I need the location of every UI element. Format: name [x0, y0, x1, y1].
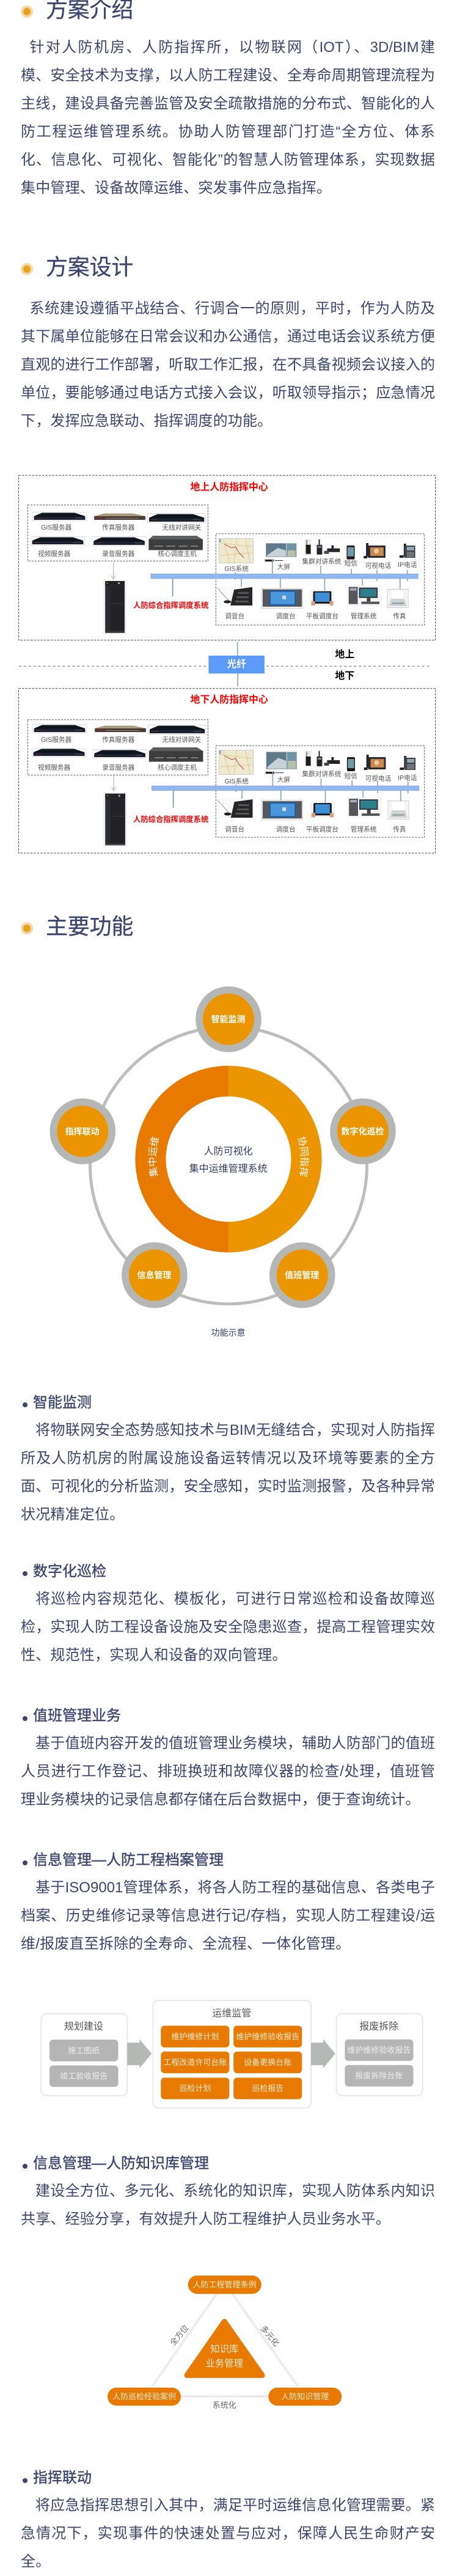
- icon: section bullet 2: [21, 263, 33, 275]
- pill: 人防巡检经验案例: [108, 2388, 181, 2406]
- node: 智能监测: 智能监测: [211, 1015, 246, 1024]
- text block: 人防工程档案管理: 维/报废直至拆除的全寿命、全流程、一体化管理。: [21, 1936, 350, 1952]
- center triangle: 知识库业务管理: 业务管理: [206, 2358, 243, 2369]
- panel: terminal group: 传真: [393, 826, 406, 834]
- panel: terminal group: 集群对讲系统: [302, 770, 342, 778]
- node: 信息管理: 信息管理: [137, 1270, 171, 1280]
- panel: 运维监管: 维护维修验收报告: [236, 2032, 299, 2041]
- pill: 人防工程管理条例: [188, 2276, 261, 2294]
- panel: server group: 无线对讲网关: [162, 524, 201, 531]
- text block: 方案设计 body: 系统建设遵循平战结合、行调合一的原则，平时，作为人防及: [29, 300, 435, 317]
- heading: 指挥联动: 指挥联动: [33, 2470, 92, 2486]
- bus line: [151, 574, 418, 579]
- text block: 智能监测: [21, 1422, 435, 1523]
- node: 信息管理: [122, 1242, 188, 1308]
- text block: 值班管理业务: 人员进行工作登记、排班换班和故障仪器的检查/处理，值班管: [21, 1763, 435, 1780]
- text block: 值班管理业务: 理业务模块的记录信息都存储在后台数据中，便于查询统计。: [21, 1791, 420, 1808]
- text block: 方案介绍 body: 针对人防机房、人防指挥所，以物联网（IOT）、3D/BIM建: [29, 39, 435, 56]
- caption: 功能示意: 功能示意: [211, 1328, 246, 1338]
- divider: ground line: [19, 665, 431, 667]
- panel: 规划建设: 竣工验收报告: [60, 2071, 108, 2081]
- chart: function ring diagram: [50, 986, 396, 1338]
- text block: 数字化巡检: 性、规范性，实现人和设备的双向管理。: [21, 1647, 287, 1664]
- feature bullet: 数字化巡检: [23, 1571, 27, 1576]
- box: 光纤: [208, 656, 265, 673]
- text block: 人防知识库管理: 共享、经验分享，有效提升人防工程维护人员业务水平。: [21, 2211, 390, 2227]
- arrow: servers to cabinet: [112, 775, 116, 791]
- connector: fiber up: [237, 642, 238, 656]
- icon: server cabinet: [103, 793, 127, 846]
- panel: terminal group: 大屏: [277, 776, 290, 784]
- feature bullet: 指挥联动: [23, 2478, 27, 2483]
- feature bullet: 值班管理业务: [23, 1716, 27, 1721]
- feature bullet: 人防知识库管理: [23, 2164, 27, 2169]
- panel: terminal group: 管理系统: [351, 612, 377, 620]
- text block: 指挥联动: 急情况下，实现事件的快速处置与应对，保障人民生命财产安: [21, 2525, 435, 2542]
- text block: 人防知识库管理: 建设全方位、多元化、系统化的知识库，实现人防体系内知识: [35, 2183, 435, 2199]
- network architecture diagram: [18, 475, 436, 854]
- panel: terminal group: [216, 534, 425, 625]
- panel: 运维监管: 维护维修计划: [171, 2032, 219, 2041]
- heading: 地上人防指挥中心: 地上人防指挥中心: [191, 481, 268, 493]
- outer ring: [90, 1027, 367, 1304]
- panel: 运维监管: 工程改造许可台账: [163, 2058, 227, 2067]
- text block: 智能监测: 将物联网安全态势感知技术与BIM无缝结合，实现对人防指挥: [35, 1422, 435, 1438]
- flow diagram: lifecycle: [40, 2000, 423, 2109]
- panel: terminal group: 管理系统: [351, 826, 377, 834]
- text block: 值班管理业务: [21, 1735, 435, 1808]
- text block: 方案设计 body: [21, 300, 435, 429]
- label: 地上: 地上: [335, 649, 354, 660]
- heading: 信息管理—人防工程档案管理: 信息管理—人防工程档案管理: [33, 1852, 224, 1868]
- panel: 规划建设: 施工图纸: [68, 2046, 100, 2055]
- pill: 人防巡检经验案例: 人防巡检经验案例: [112, 2392, 176, 2401]
- text block: 方案介绍 body: 化、信息化、可视化、智能化”的智慧人防管理体系，实现数据: [21, 152, 435, 168]
- panel: terminal group: 可视电话: [365, 774, 392, 782]
- node: 值班管理: [269, 1242, 335, 1308]
- icon: server cabinet: [103, 580, 126, 634]
- pill: 人防知识管理: 人防知识管理: [281, 2392, 329, 2401]
- outer triangle edges: [152, 2293, 298, 2396]
- connector: system stub: [173, 790, 174, 808]
- text block: 数字化巡检: 检，实现人防工程设备设施及安全隐患巡查，提高工程管理实效: [21, 1619, 435, 1635]
- panel: 报废拆除: [337, 2013, 423, 2096]
- panel: 报废拆除: 报废拆除: [359, 2021, 398, 2032]
- center triangle: 知识库业务管理: 知识库: [210, 2344, 238, 2355]
- panel: 规划建设: 规划建设: [64, 2021, 103, 2032]
- text block: 数字化巡检: 将巡检内容规范化、模板化，可进行日常巡检和设备故障巡: [35, 1591, 435, 1607]
- text block: 人防工程档案管理: [21, 1879, 435, 1952]
- text block: 值班管理业务: 基于值班内容开发的值班管理业务模块，辅助人防部门的值班: [35, 1735, 435, 1752]
- connector: fiber down: [237, 673, 238, 686]
- donut: 集中运维 half: [135, 1065, 228, 1253]
- panel: terminal group: IP电话: [398, 561, 417, 569]
- bus line: [152, 786, 419, 790]
- panel: 报废拆除: 维护维修验收报告: [347, 2046, 411, 2055]
- donut: 协同指挥 half: 协同指挥: [298, 1136, 309, 1177]
- text block: 指挥联动: [21, 2497, 435, 2570]
- text block: 人防工程档案管理: 档案、历史维修记录等信息进行记/存档，实现人防工程建设/运: [21, 1908, 435, 1924]
- panel: server group: 传真服务器: [102, 736, 135, 744]
- text block: 指挥联动: 全。: [21, 2553, 50, 2570]
- panel: terminal group: 短信: [345, 560, 357, 568]
- heading: 地下人防指挥中心: 地下人防指挥中心: [191, 694, 268, 705]
- pill: 人防工程管理条例: 人防工程管理条例: [192, 2280, 257, 2289]
- feature bullet: 人防工程档案管理: [23, 1860, 27, 1865]
- panel: 运维监管: 运维监管: [212, 2008, 251, 2019]
- center label: 人防可视化: [204, 1146, 253, 1157]
- heading: 智能监测: 智能监测: [33, 1394, 92, 1411]
- text block: 指挥联动: 将应急指挥思想引入其中，满足平时运维信息化管理需要。紧: [35, 2497, 435, 2514]
- center label: [189, 1146, 268, 1174]
- donut: 集中运维 half: 集中运维: [148, 1136, 159, 1177]
- panel: 运维监管: 设备更换台账: [244, 2058, 291, 2067]
- heading: 信息管理—人防知识库管理: 信息管理—人防知识库管理: [33, 2155, 209, 2172]
- text block: 方案设计 body: 单位，要能够通过电话方式接入会议，听取领导指示；应急情况: [21, 385, 435, 401]
- text block: 方案介绍 body: 集中管理、设备故障运维、突发事件应急指挥。: [21, 180, 331, 196]
- panel: terminal group: 可视电话: [365, 562, 392, 570]
- panel: server group: 传真服务器: [102, 524, 135, 531]
- panel: server group: 视频服务器: [38, 550, 70, 558]
- text block: 人防工程档案管理: 基于ISO9001管理体系，将各人防工程的基础信息、各类电子: [35, 1879, 435, 1896]
- text block: 方案设计 body: 直观的进行工作部署，听取工作汇报，在不具备视频会议接入的: [21, 357, 435, 373]
- heading: 值班管理业务: 值班管理业务: [33, 1708, 121, 1724]
- panel: 地下人防指挥中心: [19, 689, 436, 853]
- panel: terminal group: 调音台: [225, 612, 244, 620]
- text block: 智能监测: 状况精准定位。: [21, 1506, 124, 1523]
- text block: 智能监测: 所及人防机房的附属设施设备运转情况以及环境等要素的全方: [21, 1450, 435, 1467]
- node: 值班管理: 值班管理: [285, 1270, 319, 1280]
- node: 数字化巡检: [330, 1098, 396, 1164]
- panel: terminal group: 调度台: [276, 612, 296, 620]
- panel: terminal group: GIS系统: [224, 777, 249, 785]
- arrow: 运维 to 报废: [311, 2039, 335, 2068]
- section title: 主要功能: 主要功能: [46, 914, 133, 939]
- panel: 规划建设: [41, 2013, 127, 2096]
- panel: server group: 核心调度主机: [158, 763, 197, 771]
- node: 指挥联动: [50, 1098, 115, 1164]
- panel: server group: GIS服务器: [41, 736, 72, 744]
- panel: terminal group: 集群对讲系统: [302, 558, 342, 566]
- heading: 数字化巡检: 数字化巡检: [33, 1563, 106, 1580]
- panel: terminal group: GIS系统: [224, 565, 249, 573]
- text block: 方案设计 body: 下，发挥应急联动、指挥调度的功能。: [21, 413, 272, 429]
- label: 系统化: 系统化: [213, 2400, 236, 2410]
- panel: 运维监管: 巡检报告: [252, 2084, 283, 2093]
- panel: terminal group: 大屏: [277, 563, 290, 571]
- panel: server group: 视频服务器: [38, 763, 70, 771]
- panel: server group: 录音服务器: [102, 550, 135, 558]
- text block: 智能监测: 面、可视化的分析监测，安全感知，实时监测报警，及各种异常: [21, 1478, 435, 1495]
- center label: 集中运维管理系统: [189, 1163, 268, 1174]
- section title: 方案设计: 方案设计: [46, 254, 133, 279]
- icon: section bullet 1: [21, 6, 33, 18]
- panel: terminal group: 平板调度台: [306, 826, 338, 834]
- text block: 方案介绍 body: 模、安全技术为支撑，以人防工程建设、全寿命周期管理流程为: [21, 67, 435, 84]
- panel: server group: GIS服务器: [41, 524, 72, 531]
- feature bullet: 智能监测: [23, 1402, 27, 1407]
- text block: 方案介绍 body: [21, 39, 435, 196]
- triangle diagram: knowledge base: [108, 2275, 342, 2410]
- node: 智能监测: [196, 986, 261, 1052]
- label: 多元化: 多元化: [258, 2324, 281, 2348]
- donut: 协同指挥 half: [228, 1065, 322, 1253]
- panel: terminal group: 传真: [393, 612, 406, 620]
- panel: 运维监管: [153, 2000, 311, 2108]
- label: 地下: 地下: [335, 670, 354, 681]
- arrow: servers to cabinet: [111, 563, 115, 579]
- box: 光纤: 光纤: [227, 659, 246, 670]
- node: 指挥联动: 指挥联动: [65, 1127, 100, 1136]
- node: 数字化巡检: 数字化巡检: [341, 1127, 384, 1136]
- panel: 报废拆除: 报废拆除台账: [355, 2071, 403, 2081]
- connectors: bus stubs: [235, 560, 408, 591]
- text block: 数字化巡检: [21, 1591, 435, 1664]
- panel: server group: 核心调度主机: [158, 550, 197, 558]
- panel: terminal group: 短信: [345, 772, 357, 780]
- panel: server group: [27, 720, 208, 775]
- center triangle: 知识库业务管理: [187, 2322, 262, 2375]
- connectors: bus stubs: [236, 772, 408, 803]
- panel: terminal group: 调音台: [225, 826, 244, 834]
- panel: terminal group: [216, 746, 425, 837]
- label: 全方位: 全方位: [168, 2323, 191, 2347]
- text block: 方案介绍 body: 主线，建设具备完善监管及安全疏散措施的分布式、智能化的人: [21, 95, 435, 112]
- arrow: 规划 to 运维: [127, 2039, 152, 2068]
- pill: 人防知识管理: [268, 2388, 342, 2406]
- icon: section bullet 3: [21, 922, 33, 935]
- text block: 人防知识库管理: [21, 2183, 435, 2227]
- panel: 运维监管: 巡检计划: [179, 2084, 211, 2093]
- label: 人防综合指挥调度系统: 人防综合指挥调度系统: [133, 601, 209, 610]
- panel: terminal group: 调度台: [276, 826, 296, 834]
- panel: terminal group: 平板调度台: [306, 612, 338, 620]
- label: 人防综合指挥调度系统: 人防综合指挥调度系统: [133, 815, 209, 824]
- panel: server group: 无线对讲网关: [162, 736, 201, 744]
- panel: 地上人防指挥中心: [19, 475, 436, 640]
- text block: 方案介绍 body: 防工程运维管理系统。协助人防管理部门打造“全方位、体系: [21, 124, 435, 140]
- panel: server group: [27, 505, 208, 561]
- panel: terminal group: IP电话: [398, 774, 417, 782]
- panel: server group: 录音服务器: [102, 763, 135, 771]
- text block: 方案设计 body: 其下属单位能够在日常会议和办公通信，通过电话会议系统方便: [21, 328, 435, 345]
- connector: system stub: [172, 579, 174, 596]
